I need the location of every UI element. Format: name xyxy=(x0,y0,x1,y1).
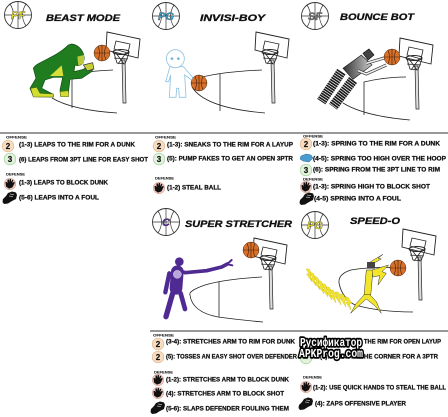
watermark: APKProg.com xyxy=(299,348,363,361)
row: tosses easy shot: 2 xyxy=(156,353,161,362)
basketball hoop xyxy=(255,32,289,103)
row: block dunk xyxy=(152,374,289,386)
heading: Bounce Bot: BOUNCE BOT xyxy=(340,12,416,22)
row: leaps to block xyxy=(4,178,108,190)
position emblem: PG: PG xyxy=(307,220,323,232)
row: tosses easy shot: (5): TOSSES AN EASY SHOT OVER DEFENDER xyxy=(166,354,297,360)
row: pump fakes: 3 xyxy=(157,155,162,164)
defense label: DEFENSE xyxy=(6,172,25,176)
panel: Speed-O xyxy=(302,212,436,313)
defense label: DEFENSE xyxy=(303,374,322,380)
basketball xyxy=(243,242,259,258)
row: slaps defender xyxy=(150,402,289,414)
watermark: Русификатор xyxy=(300,337,362,350)
position emblem: C: C xyxy=(162,217,171,229)
court lines xyxy=(190,277,263,322)
character: translucent boy xyxy=(166,50,193,97)
basketball hoop xyxy=(399,38,433,109)
row: spring from 3pt line xyxy=(300,164,440,176)
basketball hoop xyxy=(253,238,287,309)
court lines xyxy=(52,70,117,113)
row: steal ball xyxy=(153,182,221,194)
row: leaps from 3pt line: (6) LEAPS FROM 3PT LINE FOR EASY SHOT xyxy=(19,156,148,164)
row: block dunk: (1-2): STRETCHES ARM TO BLOCK DUNK xyxy=(166,376,289,384)
character: lightning hero xyxy=(351,254,389,313)
character: spring robot xyxy=(321,49,386,107)
defense label: DEFENSE xyxy=(155,176,174,180)
court lines xyxy=(339,267,413,312)
panel: Beast Mode xyxy=(4,2,140,113)
basketball xyxy=(94,45,110,61)
row: leaps into foul xyxy=(2,192,99,204)
character: purple stretching hero xyxy=(165,258,232,317)
row: spring into foul xyxy=(300,192,401,205)
row: spring from 3pt line: 3 xyxy=(304,166,309,175)
offense label: OFFENSE xyxy=(155,134,176,140)
position emblem: SF: SF xyxy=(308,11,322,23)
stat rows: Speed-O xyxy=(298,338,446,410)
heading: Speed-O: SPEED-O xyxy=(350,216,400,226)
position emblem: PG: PG xyxy=(158,11,174,23)
watermark xyxy=(299,337,363,361)
row: steal the ball xyxy=(300,381,446,393)
row: spring into foul: (4-5) SPRING INTO A FOUL xyxy=(314,196,401,202)
row: leaps to block: (1-3) LEAPS TO BLOCK DUNK xyxy=(19,180,108,186)
court lines xyxy=(343,77,410,120)
row: corner three: (5): RUNS TO THE CORNER FOR A 3PTR xyxy=(320,354,438,360)
row: spring to the rim xyxy=(300,138,440,150)
lightning speed trail xyxy=(306,269,352,310)
row: block shot xyxy=(152,387,284,399)
divider and stat rows: Super Stretcher xyxy=(150,331,448,414)
offense label: OFFENSE xyxy=(303,134,323,138)
row: zaps player xyxy=(298,398,406,410)
offense label: OFFENSE xyxy=(153,332,174,338)
row: slaps defender: (5-6): SLAPS DEFENDER FOULING THEM xyxy=(166,406,289,412)
character: green gorilla xyxy=(30,44,94,97)
row: leaps to the rim xyxy=(2,140,135,152)
row: spring high to block: (1-3): SPRING HIGH TO BLOCK SHOT xyxy=(313,184,430,190)
row: sneaks to the rim xyxy=(153,140,293,152)
row: sneaks to the rim: 2 xyxy=(157,142,162,151)
row: stretches arm to rim: 2 xyxy=(156,340,161,349)
panel: Invisi-Boy xyxy=(152,2,289,113)
position emblem: PF: PF xyxy=(11,10,25,22)
row: corner three xyxy=(300,352,438,364)
row: stretches arm to rim xyxy=(152,338,295,350)
row: leaps into foul: (5-6) LEAPS INTO A FOUL xyxy=(19,194,99,202)
panel: Bounce Bot xyxy=(302,2,433,120)
row: sneaks to the rim: (1-3): SNEAKS TO THE RIM FOR A LAYUP xyxy=(167,142,293,148)
basketball xyxy=(390,260,406,276)
divider and stat rows: Beast Mode xyxy=(0,133,448,204)
row: block shot: (4): STRETCHES ARM TO BLOCK SHOT xyxy=(166,390,284,398)
row: stretches arm to rim: (3-4): STRETCHES ARM TO RIM FOR DUNK xyxy=(166,338,295,346)
row: pump fakes xyxy=(153,153,293,165)
row: leaps to the rim: 2 xyxy=(6,142,11,151)
basketball xyxy=(384,49,400,65)
row: leaps from 3pt line xyxy=(4,153,148,165)
position emblem: C xyxy=(152,208,180,236)
defense label: DEFENSE xyxy=(303,176,323,182)
heading: Beast Mode: BEAST MODE xyxy=(46,13,121,23)
row: spring to the rim: (1-3): SPRING TO THE RIM FOR A DUNK xyxy=(313,140,440,148)
court lines xyxy=(192,70,265,113)
row: zaps player: (4): ZAPS OFFENSIVE PLAYER xyxy=(315,400,406,408)
offense label: OFFENSE xyxy=(6,134,27,140)
row: spring high to block xyxy=(300,181,430,193)
row: runs to the rim: (1-3): SPEEDS TO THE RIM FOR OPEN LAYUP xyxy=(313,338,441,346)
basketball hoop xyxy=(402,229,436,300)
defense label: DEFENSE xyxy=(154,370,173,374)
row: leaps from 3pt line: 3 xyxy=(8,155,13,164)
row: pump fakes: (5): PUMP FAKES TO GET AN OPEN 3PTR xyxy=(167,156,293,162)
row: spring too high: (4-5): SPRING TOO HIGH OVER THE HOOP xyxy=(313,156,446,162)
panel: Super Stretcher xyxy=(152,208,293,322)
row: steal ball: (1-2) STEAL BALL xyxy=(167,184,221,192)
stat rows: Bounce Bot xyxy=(300,134,446,205)
stat rows: Invisi-Boy xyxy=(153,134,293,194)
row: leaps to the rim: (1-3) LEAPS TO THE RIM FOR A DUNK xyxy=(19,142,135,148)
basketball hoop xyxy=(106,32,140,103)
row: spring to the rim: 2 xyxy=(304,140,309,149)
row: tosses easy shot xyxy=(152,351,297,363)
heading: Invisi-Boy: INVISI-BOY xyxy=(200,13,266,23)
heading: Super Stretcher: SUPER STRETCHER xyxy=(185,219,293,229)
basketball xyxy=(191,75,207,91)
row: spring from 3pt line: (6): SPRING FROM THE 3PT LINE TO RIM xyxy=(313,166,440,174)
